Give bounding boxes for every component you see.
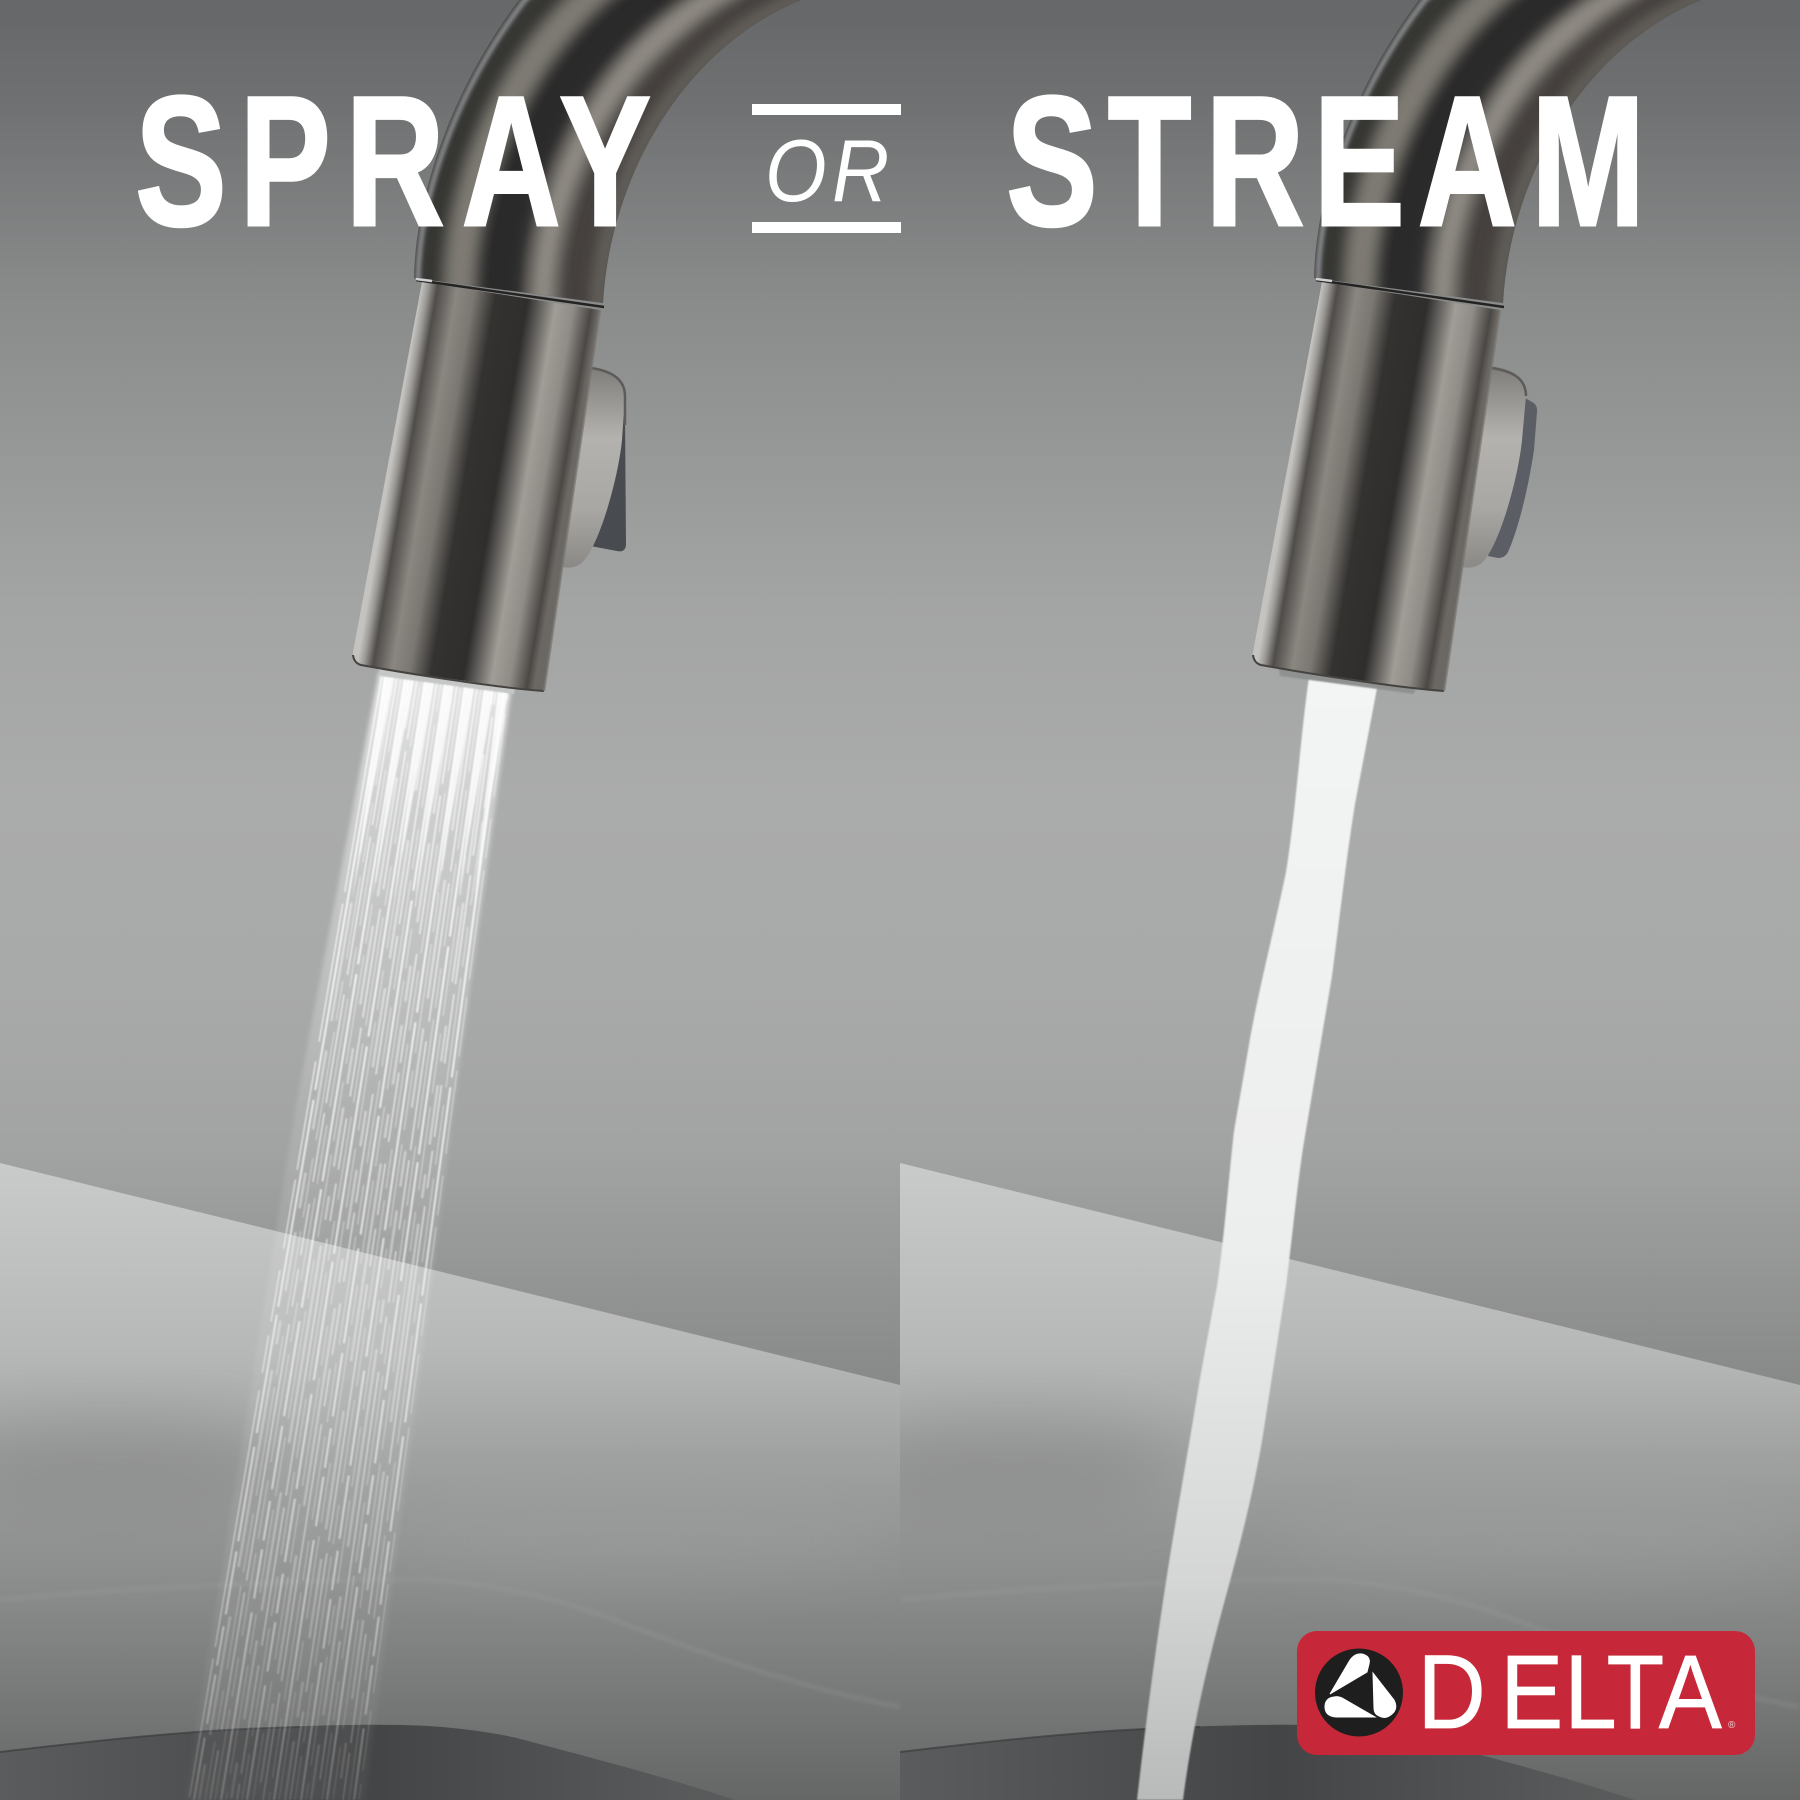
faucet button: stream side [1462, 366, 1537, 568]
faucet aerator: stream side [1278, 664, 1416, 694]
faucet body and neck: stream side [1253, 0, 1755, 691]
heading: or with rules [752, 104, 901, 233]
logo: Delta [1297, 1631, 1755, 1755]
faucet body and neck: spray side [353, 0, 855, 691]
water stream [1137, 677, 1378, 1800]
registered mark: ® [1728, 1720, 1736, 1731]
faucet button: spray side [562, 366, 626, 568]
heading: or with rules: OR [765, 121, 895, 220]
logo icon [1315, 1648, 1403, 1736]
water spray [185, 672, 511, 1800]
faucet: spray side [353, 0, 855, 694]
panel: stream background with countertop and sink [840, 0, 1800, 1800]
faucet aerator: spray side [378, 664, 516, 694]
heading: stream: STREAM [1006, 59, 1645, 265]
faucet: stream side [1253, 0, 1755, 694]
heading: spray: SPRAY [135, 59, 651, 265]
logo wordmark: DELTA [1418, 1634, 1722, 1751]
panel: spray background with countertop and sink [0, 0, 900, 1800]
